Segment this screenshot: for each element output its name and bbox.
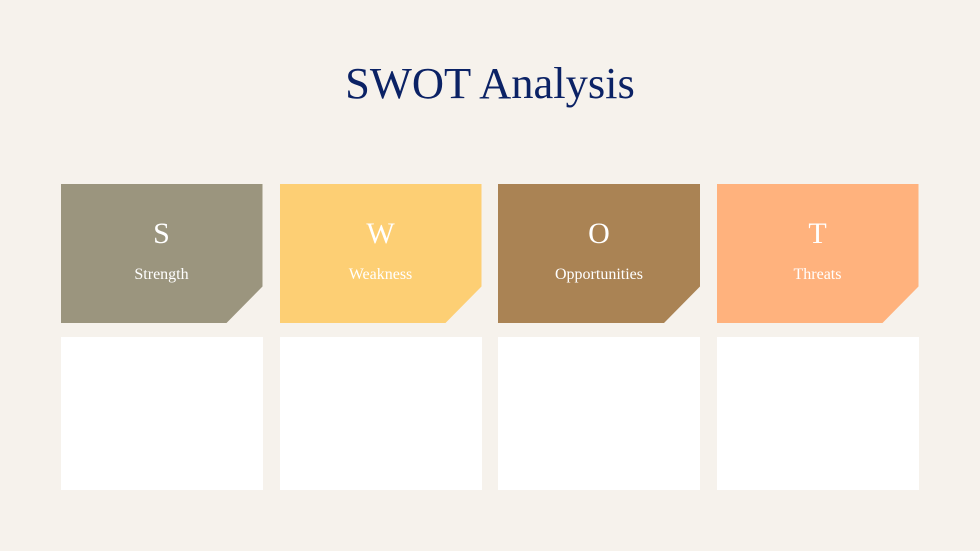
letter T: T: [808, 217, 827, 250]
panel: threats content box: [716, 336, 918, 490]
panel: weakness header: [280, 184, 482, 323]
panel: weakness content box: [280, 336, 482, 490]
panel: strength header: [60, 184, 262, 323]
panel: strength content box: [60, 336, 262, 490]
label: Strength: Strength: [134, 266, 189, 282]
letter S: S: [153, 217, 170, 250]
title: SWOT Analysis: [345, 58, 635, 108]
panel: threats header: [716, 184, 918, 323]
label: Threats: Threats: [794, 266, 841, 282]
panel: opportunities header: [498, 184, 700, 323]
label: Weakness: Weakness: [349, 266, 412, 282]
label: Opportunities: Opportunities: [555, 266, 643, 282]
panel: opportunities content box: [498, 336, 700, 490]
letter W: W: [366, 217, 395, 250]
letter O: O: [588, 217, 610, 250]
